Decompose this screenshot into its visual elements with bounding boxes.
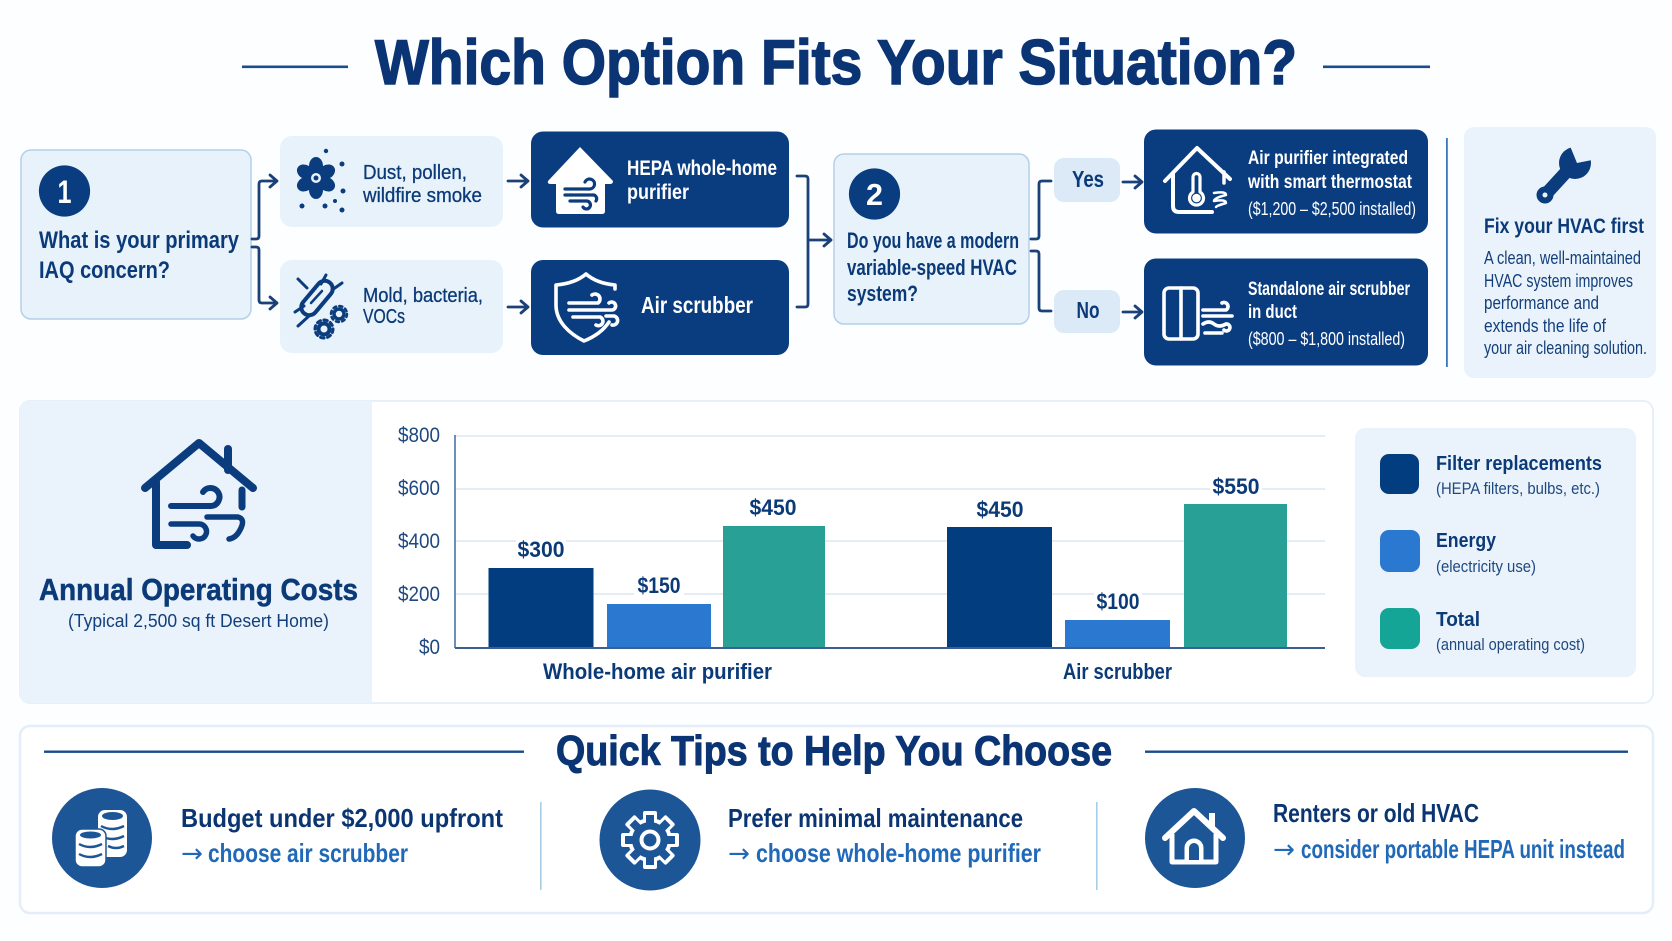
fix heading: Fix your HVAC first: [1484, 215, 1644, 238]
panel: air scrubber: [531, 260, 789, 355]
fix body text: [1484, 248, 1647, 358]
integrated purifier label: [1247, 148, 1416, 219]
bars: whole-home air purifier: $150: [638, 573, 680, 598]
tip: renters: [1145, 788, 1625, 888]
panel: dust concern: [280, 136, 503, 227]
y axis labels: $0: [419, 636, 440, 659]
budget text: Budget under $2,000 upfront: [181, 803, 503, 833]
budget text: choose air scrubber: [208, 838, 408, 868]
budget text: →: [181, 839, 203, 869]
panel: integrated air purifier: [1144, 130, 1428, 234]
integrated purifier label: with smart thermostat: [1247, 172, 1413, 193]
panel: question 2: [834, 154, 1029, 324]
question 2 text: [847, 228, 1019, 306]
question 1 text: [39, 227, 240, 284]
legend: filter replacements: Filter replacements: [1436, 453, 1602, 475]
dust label: Dust, pollen,: [363, 162, 467, 184]
question 2 text: system?: [847, 281, 918, 306]
question 1 text: What is your primary: [39, 227, 240, 254]
icon: house with thermometer: [1165, 148, 1230, 212]
step badge 1: 1: [58, 174, 72, 210]
icon: house with air: [145, 443, 253, 545]
HEPA label: purifier: [627, 181, 689, 204]
renters text: Renters or old HVAC: [1273, 798, 1479, 828]
step badge 2: [849, 168, 900, 220]
x axis labels: Whole-home air purifier: [543, 659, 772, 684]
x axis labels: [543, 659, 1172, 684]
HEPA label: [627, 157, 777, 204]
panel: question 1: [21, 150, 251, 319]
budget text: [181, 803, 503, 869]
y axis labels: $800: [398, 424, 440, 447]
mold label: Mold, bacteria,: [363, 285, 483, 307]
bars: whole-home air purifier: $450: [750, 495, 796, 520]
legend: total: [1380, 608, 1585, 654]
standalone scrubber label: [1248, 279, 1410, 349]
maintenance text: [728, 803, 1041, 869]
standalone scrubber label: ($800 – $1,800 installed): [1248, 329, 1405, 349]
HEPA label: HEPA whole-home: [627, 157, 777, 180]
icon: white house with air: [548, 147, 613, 214]
chip: no: [1054, 290, 1120, 333]
icon: pollen flower: [294, 149, 346, 212]
arrows: concerns to products: [508, 175, 528, 313]
y axis labels: $600: [398, 477, 440, 500]
step badge 2: 2: [866, 177, 883, 212]
integrated purifier label: Air purifier integrated: [1248, 148, 1408, 169]
bars: whole-home air purifier: $300: [518, 537, 564, 562]
mold label: VOCs: [363, 306, 405, 328]
chip: yes: [1054, 158, 1120, 202]
icon: coins: [52, 788, 152, 888]
panel: quick tips: [20, 726, 1653, 913]
x axis labels: Air scrubber: [1063, 659, 1172, 684]
renters text: [1273, 798, 1625, 865]
question 2 text: variable-speed HVAC: [847, 255, 1017, 280]
icon: shield with air: [556, 274, 618, 341]
chip: yes: Yes: [1072, 166, 1104, 192]
bars: air scrubber: $550: [1212, 474, 1260, 499]
panel: mold concern: [280, 260, 503, 353]
bars: whole-home air purifier: [488, 495, 825, 647]
standalone scrubber label: Standalone air scrubber: [1248, 279, 1410, 300]
integrated purifier label: ($1,200 – $2,500 installed): [1248, 199, 1416, 219]
fix body text: performance and: [1484, 293, 1599, 313]
dust label: wildfire smoke: [362, 185, 482, 207]
maintenance text: choose whole-home purifier: [756, 838, 1041, 868]
step badge 1: [39, 165, 90, 217]
legend: filter replacements: (HEPA filters, bulbs, etc.): [1436, 479, 1600, 498]
icon: bacteria and gears: [295, 275, 347, 338]
dust label: [362, 162, 482, 207]
panel: HEPA whole-home purifier: [531, 132, 789, 228]
mold label: [363, 285, 483, 328]
question 1 text: IAQ concern?: [39, 257, 170, 284]
icon: duct with air: [1164, 288, 1232, 339]
arrow: products to question 2: [797, 176, 831, 307]
y axis labels: [398, 424, 440, 659]
costs heading: Annual Operating Costs: [39, 572, 358, 607]
arrows: chips to outcomes: [1123, 176, 1142, 318]
maintenance text: →: [728, 839, 750, 869]
standalone scrubber label: in duct: [1248, 302, 1298, 323]
fix body text: extends the life of: [1484, 316, 1607, 336]
cost header block: [20, 401, 372, 703]
renters text: →: [1273, 835, 1295, 865]
panel: fix your HVAC first: [1464, 127, 1656, 378]
question 2 text: Do you have a modern: [847, 228, 1019, 253]
costs subheading: (Typical 2,500 sq ft Desert Home): [68, 611, 329, 631]
bar chart: [398, 424, 1325, 684]
bars: air scrubber: $100: [1096, 589, 1140, 614]
icon: wrench: [1536, 132, 1602, 204]
maintenance text: Prefer minimal maintenance: [728, 803, 1023, 833]
legend: energy: (electricity use): [1436, 557, 1536, 576]
legend: filter replacements: [1380, 453, 1602, 498]
fix body text: HVAC system improves: [1484, 271, 1633, 291]
chip: no: No: [1076, 297, 1100, 323]
icon: gear: [600, 790, 700, 890]
bars: air scrubber: $450: [976, 497, 1024, 522]
arrows: question 1 to concerns: [252, 175, 277, 309]
legend: energy: [1380, 530, 1536, 576]
tip: budget: [52, 788, 503, 888]
legend: total: Total: [1436, 609, 1480, 631]
title: Which Option Fits Your Situation?: [375, 28, 1297, 98]
panel: standalone air scrubber: [1144, 258, 1428, 366]
scrubber label: Air scrubber: [641, 292, 753, 318]
legend: total: (annual operating cost): [1436, 635, 1585, 654]
connectors: question 2 branches: [1031, 181, 1051, 311]
tip: maintenance: [600, 790, 1041, 890]
bars: air scrubber: [947, 474, 1287, 647]
legend: [1355, 428, 1636, 677]
y axis labels: $200: [398, 583, 440, 606]
icon: house: [1145, 788, 1245, 888]
y axis labels: $400: [398, 530, 440, 553]
panel: annual operating costs: [20, 401, 1653, 703]
legend: energy: Energy: [1436, 530, 1497, 552]
quick tips heading: Quick Tips to Help You Choose: [556, 727, 1112, 774]
